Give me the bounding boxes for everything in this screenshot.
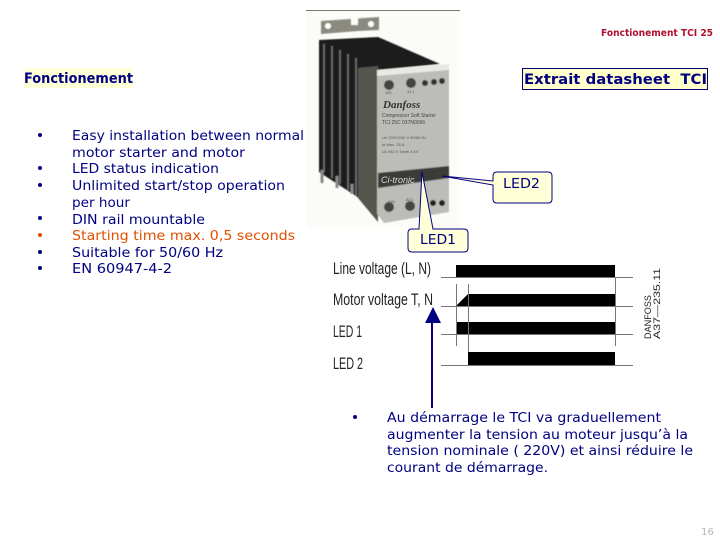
product photo: soft starter TCI 25: Ue 220V/240 V 50/60 Hz xyxy=(382,135,426,140)
timing chart xyxy=(333,259,654,373)
bullet list: features: DIN rail mountable xyxy=(72,213,205,228)
bullet list: features: Easy installation between normal xyxy=(72,129,304,144)
product photo: soft starter TCI 25: 1/N xyxy=(385,90,391,95)
chart reference: Danfoss: DANFOSS xyxy=(643,295,654,339)
product photo: soft starter TCI 25: Ci-tronic xyxy=(381,175,415,185)
note: motor start explanation: courant de démarrage. xyxy=(387,460,548,476)
callout: LED1 xyxy=(408,172,468,252)
row: LED 2 xyxy=(333,352,633,373)
bullet list: features: motor starter and motor xyxy=(72,146,246,161)
bullet list: features xyxy=(38,129,304,277)
row: motor voltage: Motor voltage T, N xyxy=(333,290,433,309)
row: line voltage: Line voltage (L, N) xyxy=(333,259,431,278)
bullet list: features: per hour xyxy=(72,196,131,211)
product photo: soft starter TCI 25: TCI 25C 037N0056 xyxy=(382,120,425,126)
note: motor start explanation: Au démarrage le TCI va graduellement xyxy=(387,410,661,426)
bullet list: features: EN 60947-4-2 xyxy=(72,262,172,277)
heading: Extrait datasheet TCI: Extrait datasheet TCI xyxy=(524,72,707,88)
bullet list: features: LED status indication xyxy=(72,162,219,177)
product photo: soft starter TCI 25: Ie Max. 25 A xyxy=(382,142,405,147)
row: line voltage xyxy=(333,259,633,278)
bullet list: features: Starting time max. 0,5 seconds xyxy=(72,229,295,244)
callout: LED2 xyxy=(442,172,552,203)
row: LED 2: LED 2 xyxy=(333,354,363,373)
arrow: to motor voltage xyxy=(425,307,441,408)
note: motor start explanation: tension nominale ( 220V) et ainsi réduire le xyxy=(387,443,693,459)
product photo: soft starter TCI 25: DIN xyxy=(388,199,395,204)
bullet list: features: Unlimited start/stop operation xyxy=(72,179,285,194)
page number: 16 xyxy=(701,527,714,538)
callout: LED2: LED2 xyxy=(503,177,540,192)
callout: LED1: LED1 xyxy=(420,233,456,248)
chart reference: part number: A37—235.11 xyxy=(652,268,663,339)
product photo: soft starter TCI 25: Uc 440 V Tamb 4 kV xyxy=(382,149,419,154)
note: motor start explanation: augmenter la tension au moteur jusqu’à la xyxy=(387,427,688,443)
heading: Fonctionement: Fonctionement xyxy=(24,71,133,87)
row: LED 1 xyxy=(333,322,633,341)
product photo: soft starter TCI 25: 31.1 xyxy=(407,89,416,94)
bullet list: features: Suitable for 50/60 Hz xyxy=(72,246,223,261)
product photo: soft starter TCI 25: Compressor Soft Starter xyxy=(382,113,436,119)
product photo: soft starter TCI 25 xyxy=(306,10,460,228)
row: LED 1: LED 1 xyxy=(333,322,362,341)
note: motor start explanation xyxy=(353,410,693,476)
row: motor voltage xyxy=(333,290,633,309)
product photo: soft starter TCI 25: Danfoss xyxy=(382,99,420,111)
product photo: soft starter TCI 25: AT1 xyxy=(406,197,414,202)
